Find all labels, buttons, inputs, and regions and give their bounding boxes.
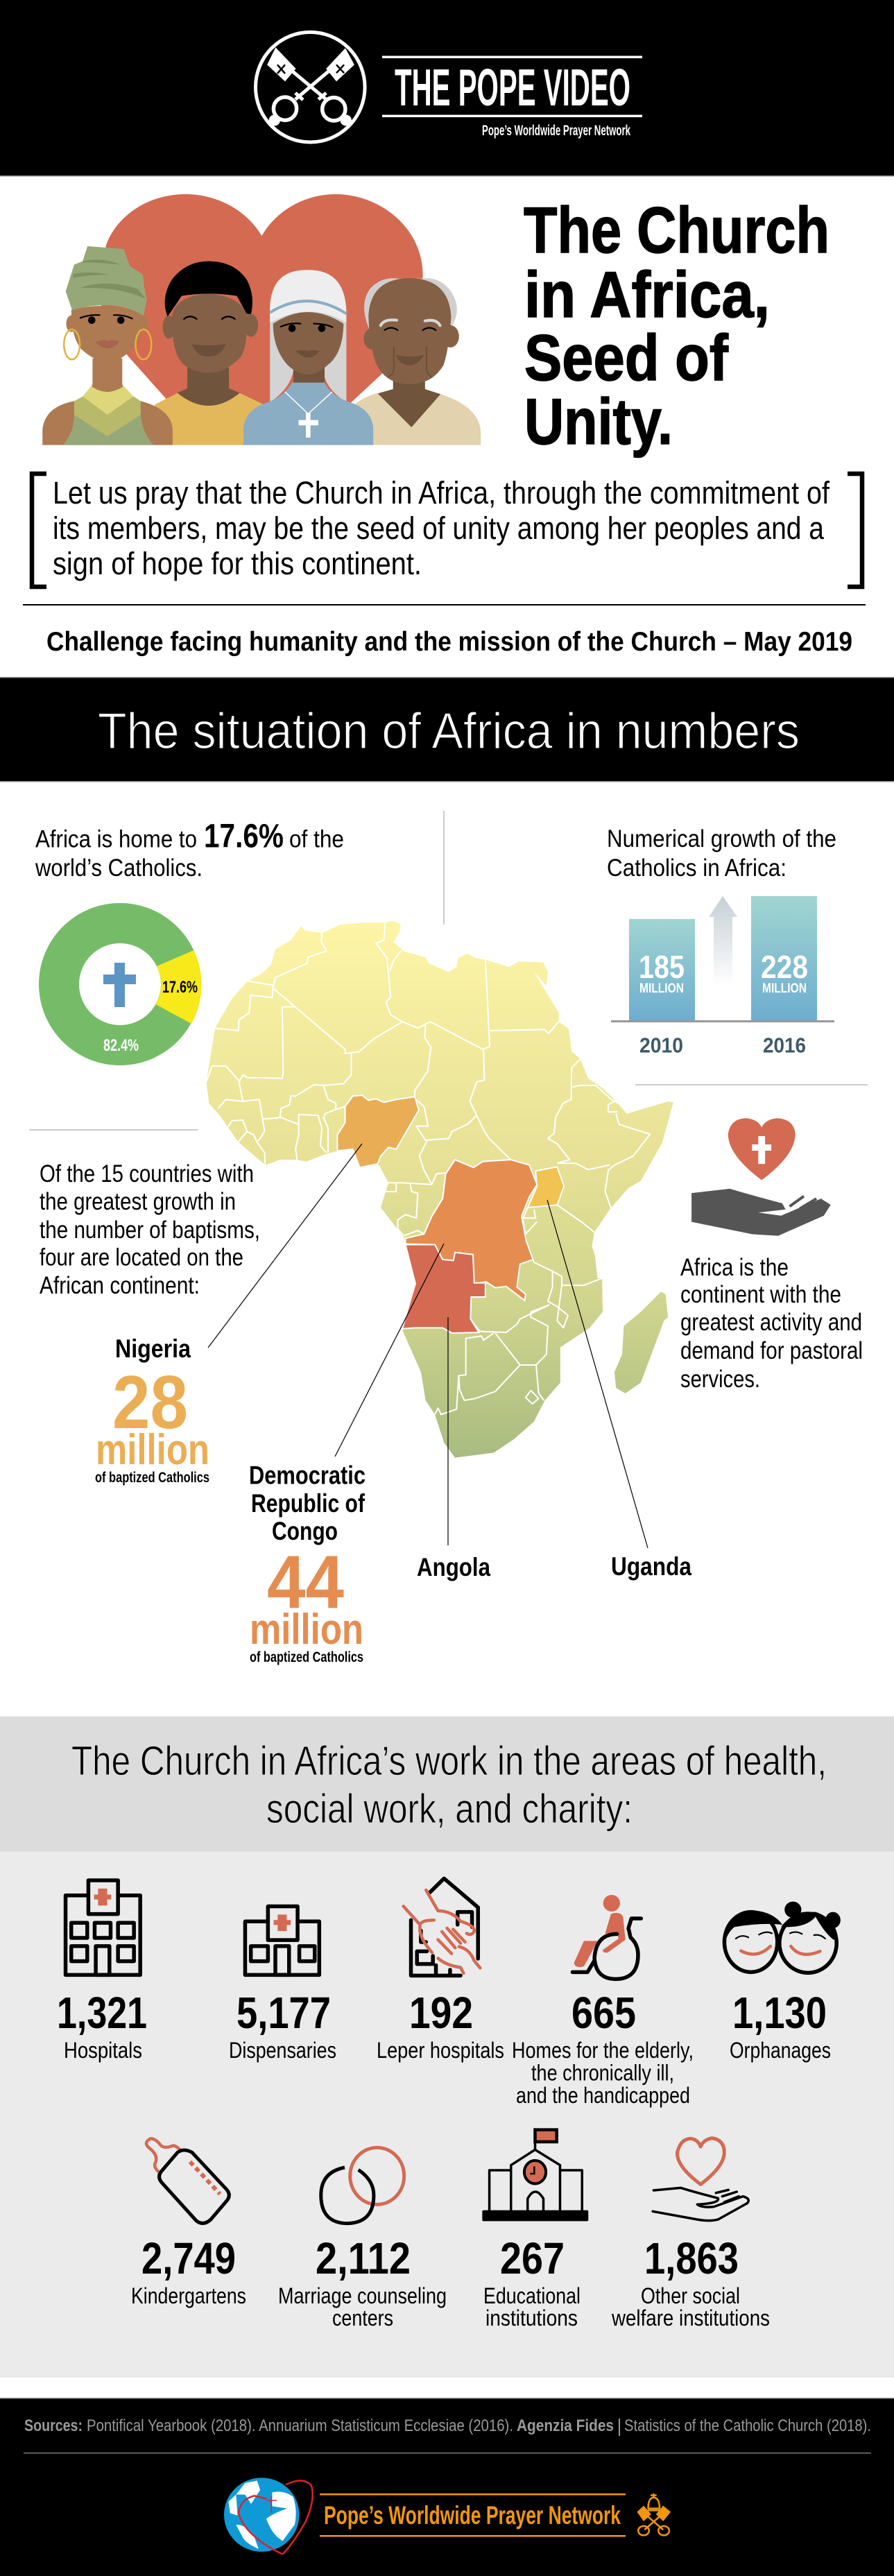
text: pastoral services: continent with the	[680, 1281, 841, 1308]
stat: hospitals: 1,321	[57, 1988, 147, 2038]
stat: other social welfare: welfare institutions	[611, 2305, 770, 2330]
stat: marriage counseling: centers	[332, 2305, 393, 2330]
text: pastoral services: services.	[680, 1366, 760, 1393]
illustration: four African people in front of a heart	[42, 194, 481, 445]
title: in Africa,	[524, 258, 770, 331]
panel: statistics	[0, 1852, 894, 2378]
stat: marriage counseling: Marriage counseling	[278, 2283, 447, 2308]
stat: kindergartens: 2,749	[141, 2233, 236, 2283]
text: numerical growth: Numerical growth of the	[607, 825, 836, 852]
stat: orphanages	[724, 1902, 841, 2063]
text: numerical growth: Catholics in Africa:	[607, 855, 786, 882]
title	[524, 194, 829, 458]
stat: educational institutions: institutions	[485, 2305, 578, 2330]
person: elder man	[356, 278, 481, 445]
text: baptisms growth: the number of baptisms,	[40, 1217, 260, 1244]
text: numerical growth	[607, 825, 836, 882]
stat: educational institutions	[482, 2129, 588, 2330]
stat: homes for elderly: the chronically ill,	[531, 2061, 674, 2086]
icon: globe with heart	[224, 2478, 313, 2554]
bar chart: Catholics 2010 vs 2016: 228	[761, 949, 808, 985]
bar chart: Catholics 2010 vs 2016	[611, 896, 834, 1057]
wordmark: Pope's Worldwide Prayer Network: Pope’s Worldwide Prayer Network	[324, 2501, 621, 2530]
stat: dispensaries: 5,177	[237, 1988, 331, 2038]
stat: other social welfare: 1,863	[644, 2233, 739, 2283]
callout: Nigeria: million	[96, 1426, 209, 1474]
stat: orphanages: Orphanages	[730, 2038, 831, 2063]
text: baptisms growth: four are located on the	[40, 1244, 243, 1271]
stat: educational institutions: 267	[500, 2233, 565, 2283]
stat: hospitals: Hospitals	[64, 2038, 142, 2063]
text: baptisms growth: African continent:	[40, 1272, 200, 1299]
Madagascar	[614, 1291, 668, 1393]
icon: crossed keys logo	[255, 32, 365, 142]
country: Nigeria	[337, 1095, 419, 1167]
title: Unity.	[524, 385, 673, 458]
sources	[24, 2416, 871, 2436]
icon: heart with cross above hand	[691, 1118, 831, 1236]
text: share of world's Catholics: Africa is home to	[35, 825, 197, 853]
callout: Democratic Republic of Congo: million	[250, 1606, 363, 1654]
text: baptisms growth: the greatest growth in	[40, 1188, 236, 1215]
stat: homes for elderly: and the handicapped	[516, 2083, 690, 2108]
heart	[98, 194, 423, 418]
stat: kindergartens: Kindergartens	[131, 2283, 246, 2308]
leader lines	[208, 1144, 648, 1548]
stat: marriage counseling	[278, 2147, 447, 2330]
callout: Nigeria: of baptized Catholics	[95, 1470, 209, 1486]
callout: Democratic Republic of Congo: Congo	[272, 1517, 338, 1545]
continent	[207, 921, 673, 1458]
donut chart	[39, 903, 202, 1065]
callout: Nigeria	[95, 1334, 209, 1486]
title: Seed of	[524, 321, 729, 394]
stat: other social welfare	[611, 2138, 770, 2330]
title: The Church	[524, 194, 829, 266]
text: pastoral services: greatest activity and	[680, 1309, 862, 1336]
stat: homes for elderly: Homes for the elderly,	[512, 2038, 694, 2063]
text: share of world's Catholics: of the	[289, 825, 344, 853]
country borders	[207, 922, 650, 1414]
stat: homes for elderly	[512, 1895, 694, 2108]
header band	[0, 0, 894, 176]
sources: Agenzia Fides	[517, 2416, 614, 2435]
stat: hospitals	[57, 1880, 147, 2063]
country: Democratic Republic of Congo	[406, 1160, 537, 1300]
stat: other social welfare: Other social	[641, 2283, 740, 2308]
text: share of world's Catholics: 17.6%	[204, 818, 284, 855]
text: baptisms growth: Of the 15 countries with	[40, 1160, 254, 1187]
prayer intention in brackets: sign of hope for this continent.	[53, 546, 422, 581]
text: share of world's Catholics	[35, 818, 344, 882]
header wordmark: Pope’s Worldwide Prayer Network	[482, 123, 630, 139]
person: woman with head wrap	[42, 246, 173, 445]
bar chart: Catholics 2010 vs 2016: 185	[639, 949, 685, 985]
icon: papal keys	[637, 2493, 671, 2535]
callout: Democratic Republic of Congo: of baptized Catholics	[250, 1649, 363, 1665]
stat: dispensaries	[229, 1907, 336, 2063]
footer	[0, 2398, 894, 2576]
country: Angola	[402, 1244, 485, 1333]
text: baptisms growth	[40, 1160, 260, 1299]
callout: Angola: Angola	[417, 1553, 490, 1581]
bar chart: Catholics 2010 vs 2016: MILLION	[639, 981, 684, 996]
donut chart: 82.4%	[103, 1036, 139, 1055]
callout: Democratic Republic of Congo: 44	[267, 1540, 344, 1624]
stat: leper hospitals: Leper hospitals	[377, 2038, 504, 2063]
section heading: Church's work	[0, 1716, 894, 1852]
stat: educational institutions: Educational	[483, 2283, 581, 2308]
stat: leper hospitals: 192	[409, 1988, 473, 2038]
callout: Nigeria: 28	[112, 1360, 188, 1445]
text: pastoral services	[680, 1254, 863, 1393]
bar chart: Catholics 2010 vs 2016: 2010	[639, 1033, 683, 1057]
prayer intention in brackets	[32, 474, 862, 587]
donut chart: 17.6%	[162, 978, 198, 997]
section banner: situation in numbers	[0, 677, 894, 782]
text: pastoral services: Africa is the	[680, 1254, 789, 1281]
callout: Democratic Republic of Congo	[249, 1461, 366, 1665]
stat: dispensaries: Dispensaries	[229, 2038, 336, 2063]
section heading: Church's work: social work, and charity:	[266, 1786, 633, 1832]
person: nun with cross	[243, 270, 373, 445]
header wordmark: THE POPE VIDEO	[395, 58, 630, 117]
callout: Uganda: Uganda	[611, 1552, 691, 1581]
section banner: situation in numbers: The situation of Africa in numbers	[98, 703, 800, 759]
bar chart: Catholics 2010 vs 2016: MILLION	[762, 981, 807, 996]
sources: Sources:	[24, 2416, 83, 2435]
person: man	[155, 261, 264, 445]
callout: Democratic Republic of Congo: Democratic	[249, 1461, 366, 1490]
callout: Nigeria: Nigeria	[115, 1334, 191, 1363]
text: share of world's Catholics: world’s Catholics.	[35, 855, 203, 882]
callout: Democratic Republic of Congo: Republic of	[251, 1489, 366, 1518]
stat: leper hospitals	[377, 1878, 504, 2063]
sources: Pontifical Yearbook (2018). Annuarium Statisticum Ecclesiae (2016).	[87, 2416, 513, 2435]
stat: orphanages: 1,130	[732, 1988, 827, 2038]
text: pastoral services: demand for pastoral	[680, 1337, 863, 1364]
country: Uganda	[528, 1167, 564, 1208]
bar chart: Catholics 2010 vs 2016: 2016	[763, 1033, 806, 1057]
stat: marriage counseling: 2,112	[316, 2233, 411, 2283]
header wordmark	[382, 55, 642, 139]
stat: kindergartens	[131, 2138, 246, 2308]
stat: homes for elderly: 665	[571, 1988, 636, 2038]
map of Africa	[207, 921, 673, 1458]
